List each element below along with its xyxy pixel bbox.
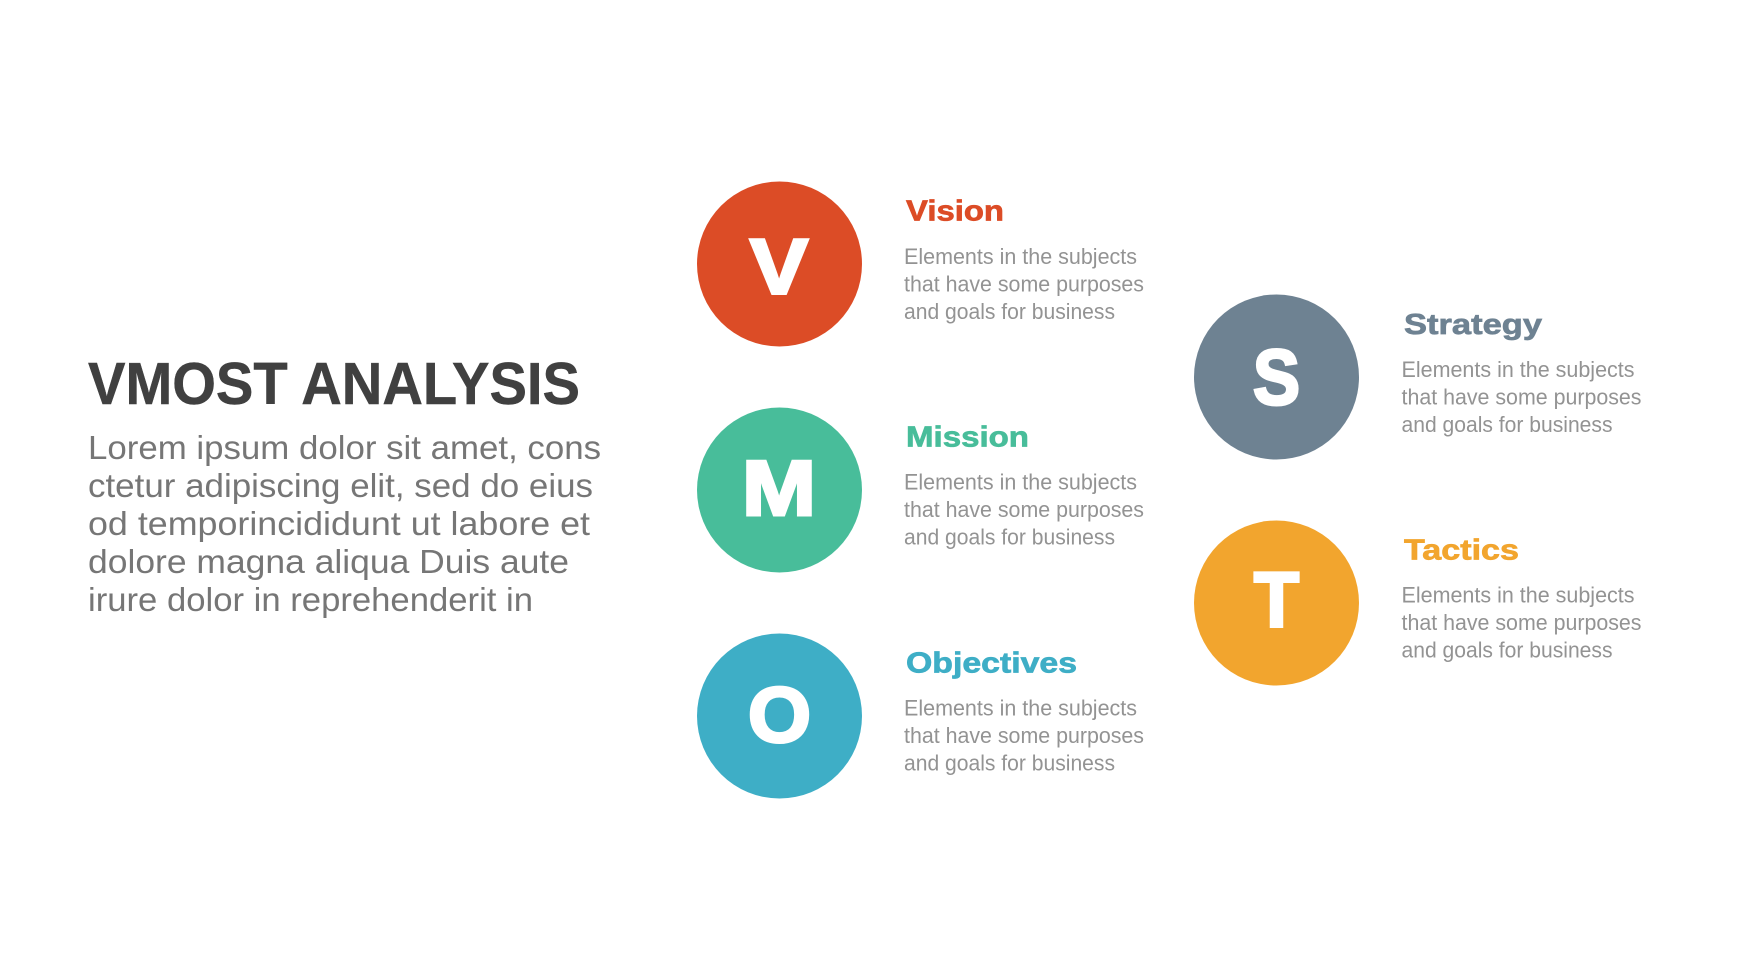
description: mission: Elements in the subjects: [904, 470, 1137, 494]
text block: intro paragraph: [88, 429, 601, 618]
description: vision: [904, 244, 1144, 324]
description: strategy: Elements in the subjects: [1402, 357, 1634, 382]
panel: strategy: [1194, 294, 1642, 460]
description: mission: that have some purposes: [904, 497, 1144, 522]
description: vision: that have some purposes: [904, 272, 1144, 296]
icon: V circle: [697, 182, 862, 346]
text block: intro paragraph: dolore magna aliqua Duis aute: [88, 543, 569, 580]
text block: intro paragraph: irure dolor in reprehenderit in: [88, 581, 533, 618]
icon: T circle: T: [1254, 556, 1299, 644]
heading: objectives: Objectives: [906, 648, 1077, 680]
description: objectives: and goals for business: [904, 750, 1115, 776]
heading: strategy: Strategy: [1404, 309, 1542, 341]
icon: V circle: V: [750, 222, 808, 310]
title: VMOST ANALYSIS: [88, 351, 580, 417]
description: objectives: Elements in the subjects: [904, 696, 1137, 720]
description: mission: [904, 470, 1144, 550]
icon: O circle: O: [748, 670, 811, 758]
description: vision: and goals for business: [904, 299, 1115, 324]
icon: M circle: M: [742, 444, 816, 532]
panel: objectives: [697, 634, 1144, 798]
text block: intro paragraph: od temporincididunt ut labore et: [88, 505, 590, 542]
description: tactics: that have some purposes: [1402, 610, 1642, 635]
panel: mission: [697, 408, 1144, 572]
heading: tactics: Tactics: [1404, 534, 1519, 566]
description: tactics: [1402, 582, 1642, 662]
description: mission: and goals for business: [904, 524, 1115, 550]
text block: intro paragraph: ctetur adipiscing elit, sed do eius: [88, 467, 593, 504]
icon: S circle: S: [1253, 333, 1300, 421]
description: vision: Elements in the subjects: [904, 244, 1137, 269]
icon: M circle: [697, 408, 862, 572]
description: strategy: and goals for business: [1402, 412, 1612, 437]
text block: intro paragraph: Lorem ipsum dolor sit amet, cons: [88, 429, 601, 466]
heading: vision: Vision: [906, 196, 1004, 228]
description: strategy: [1402, 357, 1642, 437]
description: objectives: that have some purposes: [904, 723, 1144, 748]
icon: O circle: [697, 634, 862, 798]
description: objectives: [904, 696, 1144, 776]
description: tactics: Elements in the subjects: [1402, 582, 1634, 608]
icon: T circle: [1194, 520, 1359, 686]
icon: S circle: [1194, 294, 1359, 460]
heading: mission: Mission: [906, 422, 1029, 454]
panel: tactics: [1194, 520, 1642, 686]
panel: vision: [697, 182, 1144, 346]
description: strategy: that have some purposes: [1402, 384, 1642, 410]
description: tactics: and goals for business: [1402, 638, 1612, 662]
